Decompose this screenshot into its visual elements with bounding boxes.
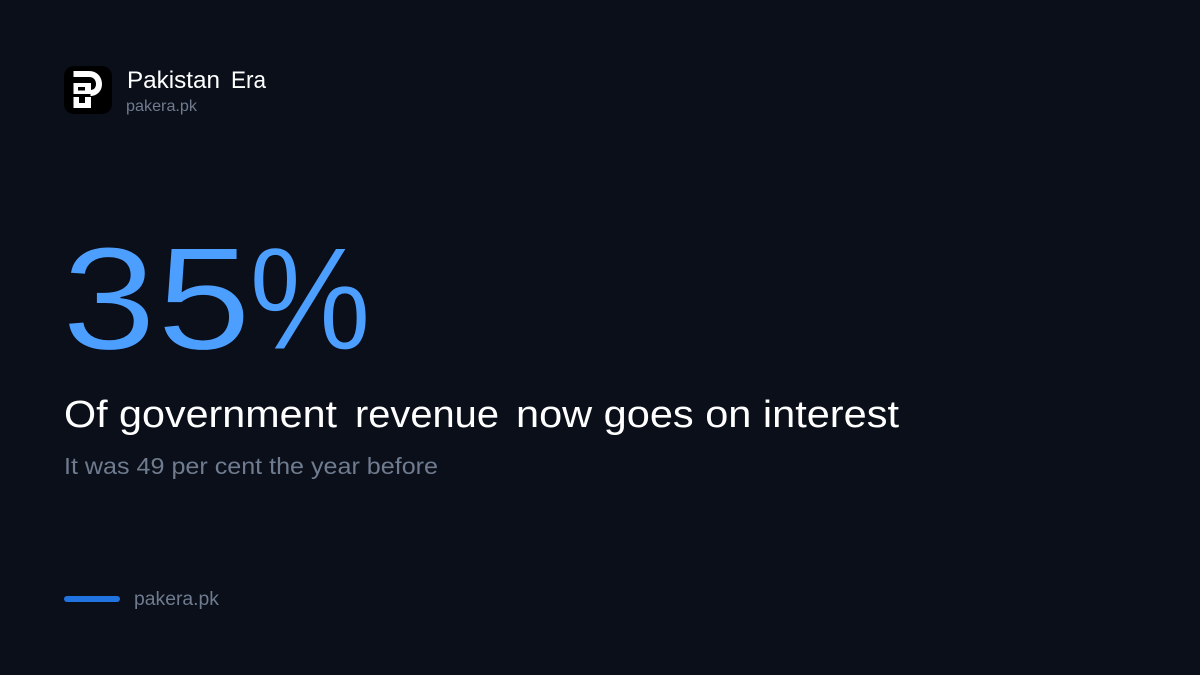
accent bar <box>64 596 120 602</box>
brand name: Pakistan <box>127 67 220 94</box>
footer <box>64 589 219 610</box>
big statistic: 5 <box>157 217 251 380</box>
big statistic: 3 <box>62 217 156 380</box>
brand name: Era <box>231 67 267 94</box>
headline: Of government <box>64 394 337 436</box>
icon: Pakistan Era logo <box>64 66 112 114</box>
subheading: It was 49 per cent the year before <box>64 453 438 479</box>
brand header <box>64 66 267 115</box>
footer url: pakera.pk <box>134 589 219 610</box>
headline: revenue <box>355 394 499 436</box>
big statistic <box>62 217 371 380</box>
headline: now goes on interest <box>516 394 899 436</box>
big statistic: % <box>249 217 371 380</box>
brand url: pakera.pk <box>126 98 198 115</box>
